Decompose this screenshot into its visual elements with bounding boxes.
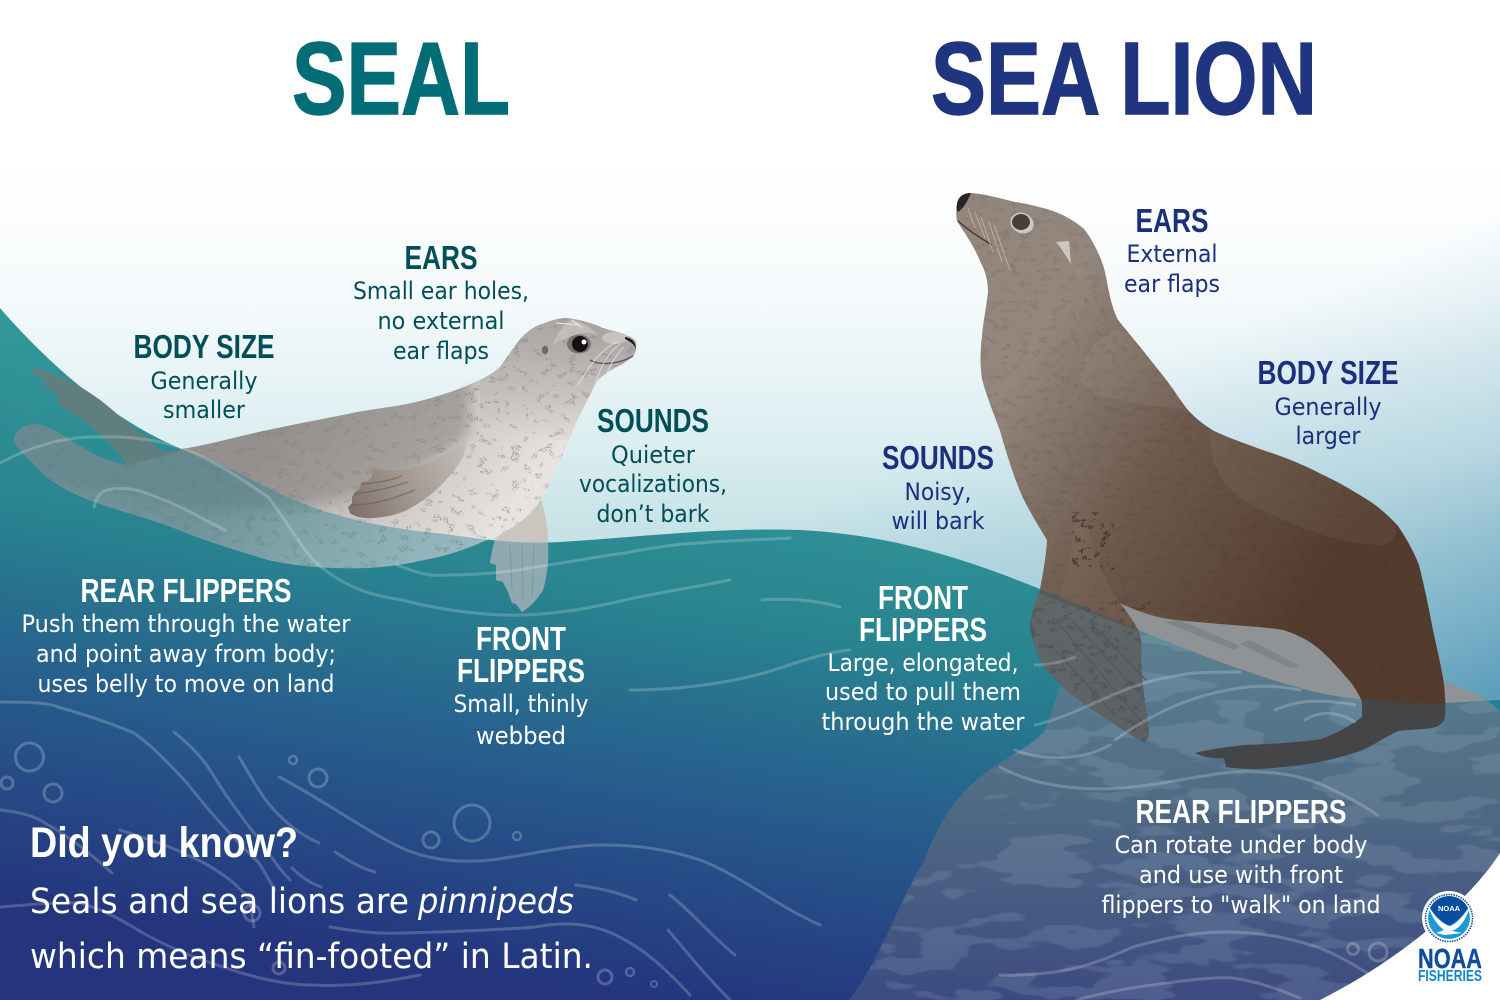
sea lion flipper speckles xyxy=(1030,512,1150,745)
icon: sea lion flipper toes xyxy=(1055,620,1146,720)
seal head shading xyxy=(480,318,636,436)
sea lion label: rear flippers: flippers to "walk" on land xyxy=(1102,891,1380,919)
seal label: ears xyxy=(353,239,529,365)
Fisheries wordmark: FISHERIES xyxy=(1418,968,1482,985)
did you know callout xyxy=(30,819,593,977)
sea lion label: front flippers: used to pull them xyxy=(825,678,1021,706)
sea lion mouth and whiskers xyxy=(958,208,1010,270)
sea lion label: body size: BODY SIZE xyxy=(1258,354,1398,391)
seal underwater tint xyxy=(14,384,548,612)
seal far front flipper xyxy=(490,495,548,612)
seal muzzle highlight xyxy=(602,332,628,344)
did you know callout: pinnipeds xyxy=(417,882,574,922)
seal flipper digit lines xyxy=(352,476,415,505)
sea lion underwater tint xyxy=(1030,589,1446,769)
white bottom-right corner xyxy=(1320,853,1500,1000)
seal label: body size: smaller xyxy=(163,396,245,424)
did you know callout: Seals and sea lions are xyxy=(30,882,409,922)
sea lion label: ears: EARS xyxy=(1136,202,1208,239)
seal upper body shade xyxy=(14,382,475,510)
NOAA wordmark: NOAA xyxy=(1418,943,1482,974)
sea lion body xyxy=(940,180,1460,780)
sea lion label: front flippers: Large, elongated, xyxy=(828,649,1018,677)
seal far flipper digits xyxy=(510,545,534,600)
seal label: body size: BODY SIZE xyxy=(134,328,274,365)
seal speckles xyxy=(68,318,636,568)
sea lion label: body size xyxy=(1258,354,1398,450)
seal label: rear flippers: Push them through the water xyxy=(22,610,351,638)
sea lion label: ears: External xyxy=(1126,240,1218,268)
seal label: sounds: SOUNDS xyxy=(597,402,709,439)
seal label: ears: no external xyxy=(378,307,504,335)
sea lion label: body size: Generally xyxy=(1274,393,1382,421)
sea lion label: ears: ear flaps xyxy=(1124,270,1220,298)
seal mouth and whiskers xyxy=(556,320,633,392)
sea lion label: front flippers: through the water xyxy=(822,708,1025,736)
sea lion front leg xyxy=(1032,576,1149,743)
seal label: body size: Generally xyxy=(150,367,258,395)
icon: NOAA emblem: NOAA xyxy=(1438,904,1461,913)
sea lion label: rear flippers: and use with front xyxy=(1139,861,1343,889)
seal label: front flippers: FLIPPERS xyxy=(457,652,585,689)
seal label: front flippers: FRONT xyxy=(476,620,566,657)
sea lion label: body size: larger xyxy=(1296,422,1361,450)
seal brow highlight xyxy=(553,320,598,344)
sea lion label: rear flippers: REAR FLIPPERS xyxy=(1136,793,1346,830)
title: SEA LION: SEA LION xyxy=(931,21,1317,136)
seal xyxy=(0,300,650,612)
title: SEAL: SEAL xyxy=(292,21,510,136)
seal label: rear flippers: and point away from body; xyxy=(36,640,336,668)
sea lion label: sounds: will bark xyxy=(892,507,985,535)
sea lion label: rear flippers xyxy=(1102,793,1380,919)
seal label: ears: Small ear holes, xyxy=(353,277,529,305)
sea lion label: ears xyxy=(1124,202,1220,298)
sea lion label: sounds: Noisy, xyxy=(904,478,972,506)
sea lion fur texture xyxy=(962,195,1209,582)
icon: seal ear hole xyxy=(542,346,548,354)
sea lion label: front flippers: FLIPPERS xyxy=(859,611,987,648)
sea lion label: front flippers xyxy=(822,579,1025,736)
seal near flipper xyxy=(348,437,468,518)
seal body xyxy=(14,318,615,568)
water body xyxy=(0,308,1500,1000)
sea lion xyxy=(956,193,1446,769)
icon: sea lion eye xyxy=(1007,209,1037,237)
seal label: rear flippers: uses belly to move on land xyxy=(38,670,334,698)
sea lion shoulder and rear patches xyxy=(1155,383,1396,545)
seal label: rear flippers xyxy=(22,572,351,698)
bubbles xyxy=(1,743,1387,987)
swirl lines xyxy=(0,437,1377,1000)
seal label: ears: EARS xyxy=(404,239,478,276)
seal label: sounds xyxy=(579,402,727,528)
sea lion label: sounds xyxy=(882,439,994,535)
seal label: sounds: vocalizations, xyxy=(579,470,727,498)
sea lion label: sounds: SOUNDS xyxy=(882,439,994,476)
sea lion label: front flippers: FRONT xyxy=(878,579,968,616)
seal label: front flippers: Small, thinly xyxy=(454,690,588,718)
seal label: sounds: Quieter xyxy=(611,441,695,469)
did you know callout: which means “fin-footed” in Latin. xyxy=(30,937,593,977)
rock under sea lion xyxy=(850,580,1500,1000)
seal label: ears: ear flaps xyxy=(393,337,489,365)
NOAA Fisheries logo xyxy=(1418,891,1482,985)
rock texture blotches xyxy=(850,620,1500,1000)
seal upper hind flipper xyxy=(32,368,187,465)
icon: seal nose xyxy=(625,337,636,349)
icon: sea lion nose xyxy=(957,193,971,212)
seal label: front flippers: webbed xyxy=(476,722,566,750)
sea lion label: rear flippers: Can rotate under body xyxy=(1114,831,1368,859)
seal label: front flippers xyxy=(454,620,588,750)
seal label: sounds: don’t bark xyxy=(596,500,710,528)
seal label: body size xyxy=(134,328,274,424)
did you know callout: Did you know? xyxy=(30,819,298,867)
seal label: rear flippers: REAR FLIPPERS xyxy=(80,572,292,609)
icon: sea lion ear flap xyxy=(1056,241,1071,264)
icon: seal eye xyxy=(567,334,591,354)
